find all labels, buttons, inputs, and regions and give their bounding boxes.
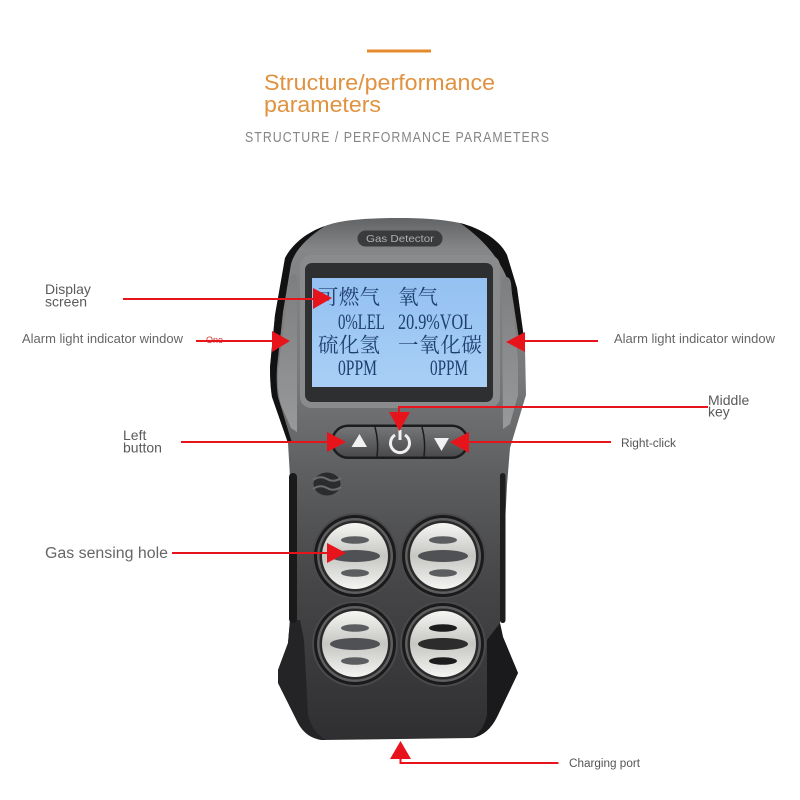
screen frame xyxy=(300,255,500,408)
gas sensor bottom left xyxy=(312,601,398,687)
label: charging port: Charging port xyxy=(569,758,641,770)
LCD display: 一氧化碳 xyxy=(398,334,482,357)
label: display screen xyxy=(45,281,91,310)
lower right flare xyxy=(472,623,518,738)
label: middle key: key xyxy=(708,404,730,420)
label: left button: button xyxy=(123,440,162,456)
icon: logo waves xyxy=(313,472,341,496)
subtitle: STRUCTURE / PERFORMANCE PARAMETERS xyxy=(245,130,550,146)
arrow: display screen xyxy=(123,288,332,309)
brand badge: Gas Detector xyxy=(366,233,435,245)
left black edge band xyxy=(270,226,325,443)
gas sensor bottom right xyxy=(400,601,486,687)
right black edge band xyxy=(460,223,525,345)
label: display screen: Display xyxy=(45,281,91,297)
gas sensor top left xyxy=(312,513,398,599)
screen bezel xyxy=(305,263,493,402)
label: display screen: screen xyxy=(45,294,87,310)
device silhouette xyxy=(270,218,526,740)
icon: up triangle xyxy=(352,434,367,447)
arrow: left button xyxy=(181,432,346,452)
brand badge xyxy=(358,230,442,246)
arrow: charging port xyxy=(390,741,558,764)
LCD display: 硫化氢 xyxy=(318,334,380,357)
LCD display: 0%LEL xyxy=(338,309,385,334)
arrow: alarm light right xyxy=(506,332,598,352)
LCD display xyxy=(312,278,487,387)
label: One: One xyxy=(206,335,223,345)
accent bar xyxy=(367,50,431,52)
label: left button: Left xyxy=(123,427,146,443)
device: gas detector xyxy=(270,218,526,740)
arrow: middle key xyxy=(389,406,708,431)
title: Structure/performance xyxy=(264,70,495,95)
LCD display: 20.9%VOL xyxy=(398,309,473,334)
lower left flare xyxy=(278,620,326,740)
label: middle key xyxy=(708,392,749,420)
right side window xyxy=(502,277,518,429)
arrow: gas sensing hole xyxy=(172,543,346,563)
arrow: alarm light left xyxy=(196,331,290,352)
label: left button xyxy=(123,427,162,456)
label: middle key: Middle xyxy=(708,392,749,408)
label: gas sensing hole: Gas sensing hole xyxy=(45,545,168,562)
LCD display: 氧气 xyxy=(398,286,438,309)
arrow: right-click xyxy=(450,432,611,453)
LCD display: 0PPM xyxy=(430,355,468,380)
label: right-click: Right-click xyxy=(621,438,676,450)
title second line: parameters xyxy=(264,92,381,117)
icon: power xyxy=(390,430,409,453)
side grip left xyxy=(289,473,297,623)
label: alarm light right: Alarm light indicator window xyxy=(614,332,776,346)
control buttons xyxy=(331,424,469,459)
gas sensor top right xyxy=(400,513,486,599)
LCD display: 0PPM xyxy=(338,355,377,380)
icon: down triangle xyxy=(434,438,449,451)
side grip right xyxy=(500,473,506,623)
LCD display: 可燃气 xyxy=(318,286,380,309)
label: alarm light left: Alarm light indicator window xyxy=(22,332,184,346)
left side window xyxy=(278,274,297,432)
